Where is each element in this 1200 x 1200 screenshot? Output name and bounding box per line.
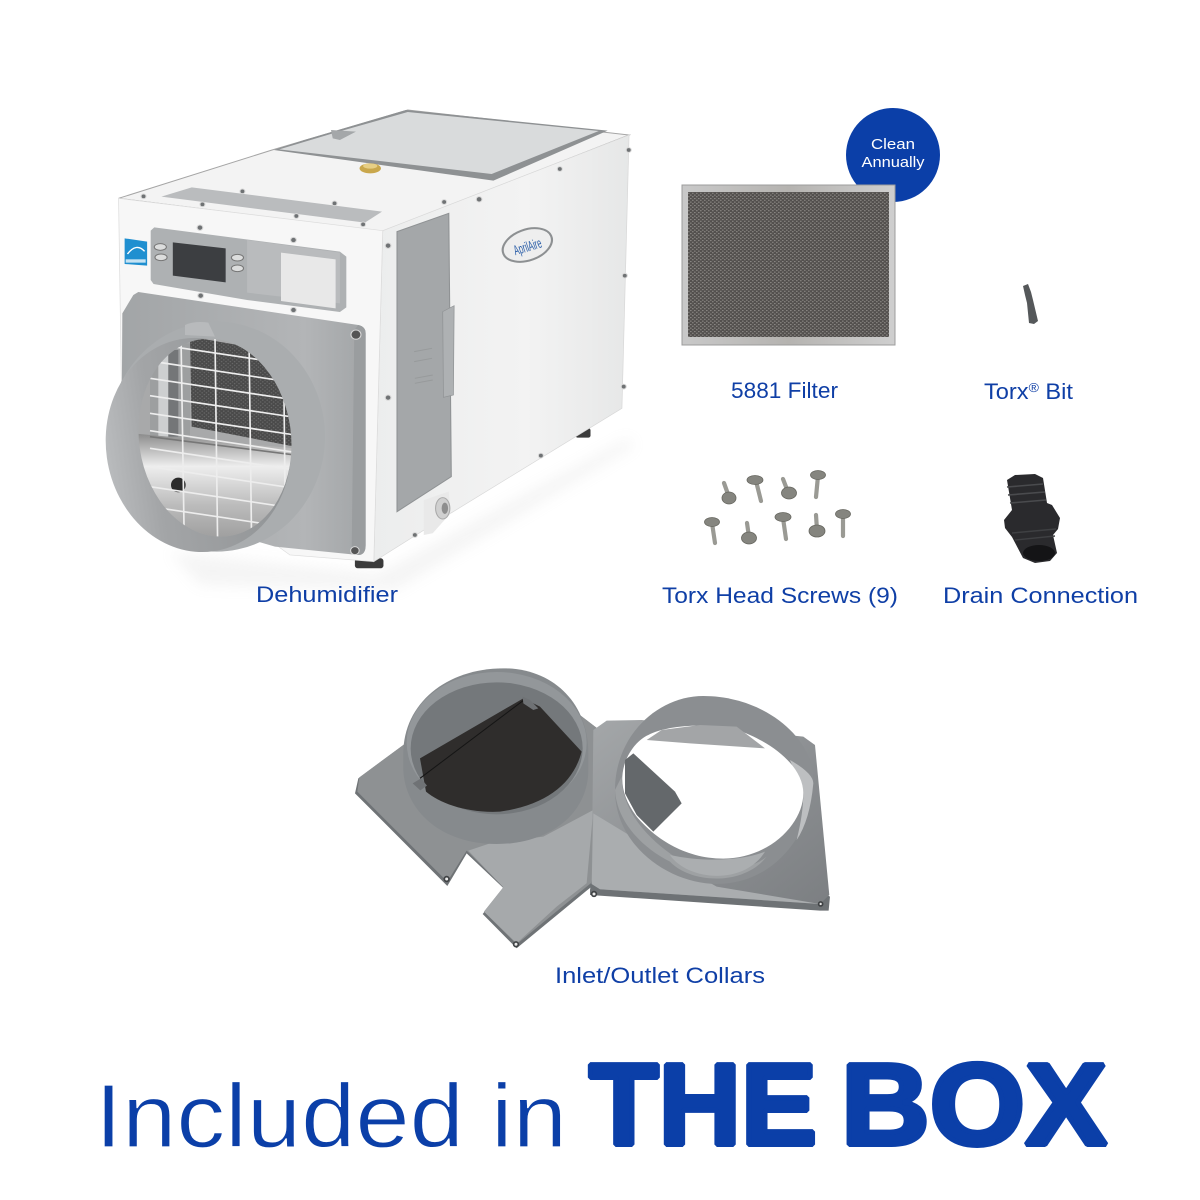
duct tube outer [108, 322, 325, 552]
torx head screws [704, 470, 850, 544]
duct collar assembly [92, 292, 366, 564]
inlet mounting holes [444, 877, 518, 947]
label: Torx Bit: Torx [984, 379, 1026, 404]
far inner wall [647, 725, 765, 748]
side access panel [397, 213, 454, 512]
display screen [173, 242, 226, 282]
outlet collar [590, 696, 830, 911]
right side face [374, 135, 629, 562]
energy star badge [125, 238, 147, 266]
torx bit [1023, 284, 1038, 324]
white label square [281, 253, 336, 308]
outlet mounting holes [592, 892, 823, 906]
top face [119, 110, 629, 232]
label: Torx Bit: Bit [1039, 379, 1073, 404]
tube interior with grille [138, 339, 292, 536]
heading: Included in THE BOX: THE [589, 1040, 817, 1170]
drain port [424, 492, 451, 535]
label: 5881 Filter: 5881 Filter [731, 378, 838, 403]
see-through opening [622, 726, 803, 859]
assembly screws [141, 148, 631, 555]
right collar plate [590, 720, 830, 911]
control panel [151, 227, 346, 312]
dark damper [420, 698, 582, 812]
front top panel [161, 187, 382, 223]
inner right wall [790, 760, 813, 840]
label: Dehumidifier: Dehumidifier [256, 582, 398, 607]
rear top access panel [274, 110, 608, 181]
brass fitting [360, 163, 381, 173]
label: Torx Head Screws: Torx Head Screws (9) [662, 583, 898, 608]
right collar ring [615, 696, 813, 884]
inlet and outlet collars [355, 668, 830, 948]
label: Torx Bit: ® [1029, 380, 1039, 395]
AprilAire logo badge: AprilAire [512, 236, 544, 259]
control buttons [154, 244, 244, 272]
left collar plate [355, 668, 682, 948]
badge: Clean Annually [846, 108, 940, 202]
badge: Clean Annually: Annually [862, 155, 925, 171]
plate corner seen through opening [625, 753, 682, 832]
left collar ring [403, 668, 588, 844]
heading: Included in THE BOX: BOX [841, 1040, 1107, 1170]
feet [355, 428, 591, 568]
dehumidifier unit [92, 110, 634, 590]
label: Drain Connection: Drain Connection [943, 583, 1138, 608]
label: Inlet/Outlet Collars: Inlet/Outlet Collars [555, 963, 765, 988]
collar plate [122, 292, 366, 555]
badge: Clean Annually: Clean [871, 137, 915, 153]
inlet collar [355, 668, 682, 948]
ground shadow [170, 438, 634, 590]
drain connection fitting [1004, 474, 1060, 563]
5881 filter [682, 185, 895, 345]
unit body [119, 110, 629, 568]
tube front wall [92, 326, 305, 564]
heading: Included in THE BOX [95, 1040, 1107, 1170]
heading: Included in THE BOX: Included in [95, 1067, 567, 1167]
wire grille [150, 337, 295, 547]
front face [119, 198, 383, 562]
AprilAire logo badge [497, 222, 557, 268]
